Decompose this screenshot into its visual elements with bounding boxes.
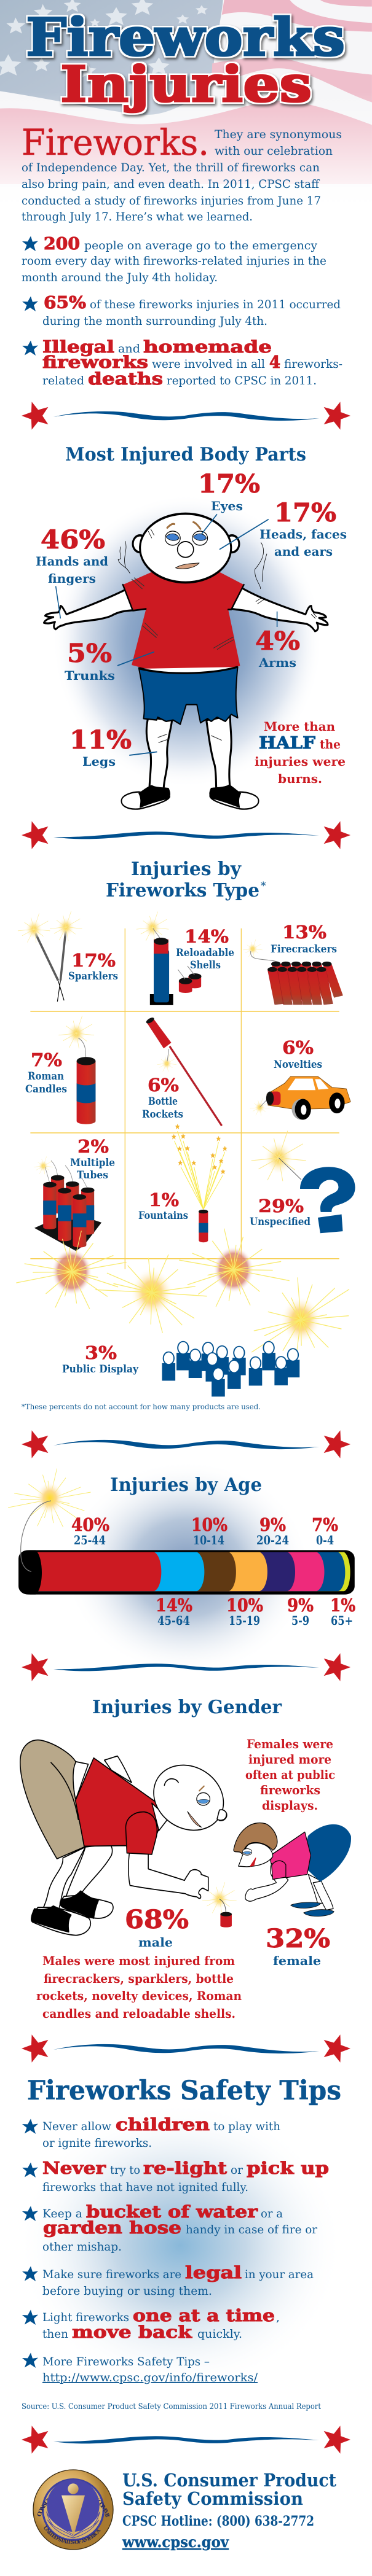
icon: question mark: [251, 1130, 355, 1233]
label: eyes: [198, 469, 260, 513]
heading: injuries by fireworks type: Fireworks Type: [106, 880, 259, 901]
tip: re-light: try to: [110, 2164, 140, 2177]
divider: [22, 821, 350, 849]
intro text: Fireworks.: [22, 122, 209, 163]
labels: fireworks type percentages: Rockets: [142, 1108, 183, 1121]
labels: age groups: 10%: [226, 1595, 263, 1616]
icon: CPSC seal: CONSUMER PRODUCT SAFETY COMMISSION: [37, 2498, 109, 2518]
tip: one at a time: Light fireworks: [42, 2311, 129, 2324]
bullet: 65 percent: 65%: [44, 294, 86, 313]
tip: bucket of water: Keep a: [42, 2208, 82, 2220]
label: trunks: [65, 639, 115, 683]
labels: fireworks type percentages: Multiple: [70, 1157, 115, 1169]
divider: [22, 2034, 350, 2063]
footnote: *These percents do not account for how many products are used.: [22, 1402, 261, 1411]
callout: males: rockets, novelty devices, Roman: [36, 1988, 242, 2003]
intro text: also bring pain, and even death. In 2011, CPSC staff: [22, 178, 320, 191]
chart: age firecracker bar: [8, 1469, 355, 1595]
intro text: conducted a study of fireworks injuries from June 17: [22, 195, 321, 208]
callout: females: fireworks: [260, 1783, 320, 1797]
bullet: illegal and homemade: [22, 338, 342, 389]
labels: fireworks type percentages: 7%: [31, 1049, 62, 1070]
labels: age groups: 0-4: [316, 1533, 334, 1547]
labels: fireworks type percentages: Candles: [25, 1083, 67, 1095]
title: Fireworks: [26, 7, 345, 68]
illustration: public display bursts and crowd: [16, 1229, 363, 1396]
callout: burns: the: [320, 737, 341, 752]
label: arms: 4%: [255, 626, 300, 656]
icon: reloadable shells: [137, 912, 202, 1005]
heading: injuries by fireworks type: [106, 858, 266, 901]
bullet: illegal and homemade: deaths: [88, 370, 163, 389]
tip: bucket of water: or a: [261, 2208, 283, 2220]
bullet: illegal and homemade: and: [118, 343, 140, 356]
callout: males: candles and reloadable shells.: [42, 2006, 235, 2021]
divider: [22, 2426, 350, 2454]
bullet: illegal and homemade: related: [42, 375, 84, 387]
label: hands and fingers: [36, 525, 108, 586]
tip: one at a time: quickly.: [197, 2328, 242, 2341]
intro text: with our celebration: [215, 145, 333, 158]
tip: children: to play with: [213, 2120, 280, 2133]
label: trunks: Trunks: [65, 668, 115, 683]
tip: bucket of water: other mishap.: [42, 2241, 122, 2254]
stat: female: [266, 1924, 330, 1968]
tip: bucket of water: handy in case of fire or: [186, 2224, 317, 2236]
callout: males: Males were most injured from: [42, 1953, 235, 1968]
agency contact: [122, 2470, 337, 2551]
tip: children: or ignite fireworks.: [42, 2137, 152, 2150]
bullet: illegal and homemade: 4: [269, 353, 280, 372]
glow behind age chart: [65, 1460, 311, 1675]
label: heads, faces and ears: Heads, faces: [259, 527, 347, 542]
intro text: [22, 122, 342, 224]
illustration: injured man: [44, 494, 328, 809]
label: legs: Legs: [82, 754, 116, 769]
bullet: illegal and homemade: Illegal: [42, 338, 114, 357]
labels: age groups: 7%: [312, 1514, 338, 1535]
labels: fireworks type percentages: Tubes: [77, 1169, 108, 1181]
icon: fountain: [172, 1124, 228, 1242]
tip: more tips link: [22, 2353, 258, 2384]
tip: re-light: Never: [42, 2159, 106, 2178]
heading: injuries by age: Injuries by Age: [110, 1474, 262, 1496]
tip: legal: [22, 2263, 314, 2298]
tip: bucket of water: bucket of water: [86, 2203, 258, 2222]
label: hands and fingers: fingers: [48, 571, 96, 586]
labels: fireworks type percentages: 3%: [85, 1342, 117, 1363]
labels: age groups: 10%: [191, 1514, 228, 1535]
bullet: 200 people: [22, 235, 326, 284]
label: arms: Arms: [258, 655, 296, 670]
divider: [22, 1653, 350, 1681]
callout: burns: injuries were: [255, 754, 346, 769]
stat: female: female: [273, 1953, 321, 1968]
bullet: illegal and homemade: fireworks-: [284, 358, 342, 371]
label: legs: 11%: [69, 725, 132, 755]
callout: females: injured more: [248, 1752, 331, 1767]
bullet: illegal and homemade: fireworks: [42, 353, 148, 372]
callout: females: [245, 1737, 335, 1813]
labels: age groups: 20-24: [256, 1533, 289, 1547]
callout: females: displays.: [262, 1798, 318, 1813]
heading: most injured body parts: Most Injured Body Parts: [65, 444, 306, 465]
labels: fireworks type percentages: Firecrackers: [271, 943, 337, 955]
labels: age groups: 10-14: [193, 1533, 224, 1547]
glow behind tips: [17, 2101, 343, 2390]
labels: fireworks type percentages: 13%: [282, 922, 326, 943]
labels: fireworks type percentages: Novelties: [274, 1059, 322, 1071]
icon: novelty car: [250, 1076, 350, 1119]
stat: male: male: [138, 1935, 173, 1950]
labels: fireworks type percentages: 1%: [149, 1189, 179, 1210]
labels: age groups: 14%: [156, 1595, 192, 1616]
tip: legal: legal: [185, 2263, 242, 2282]
labels: fireworks type percentages: Roman: [28, 1070, 64, 1083]
illustration: bending man and woman with firework: [20, 1740, 350, 1936]
label: heads, faces and ears: and ears: [274, 544, 333, 559]
labels: age groups: 40%: [71, 1514, 109, 1535]
callout: burns: More than: [264, 719, 335, 734]
source note: Source: U.S. Consumer Product Safety Commission 2011 Fireworks Annual Report: [22, 2402, 322, 2411]
icon: CPSC seal: UNITED STATES OF AMERICA: [44, 2525, 101, 2544]
tip: re-light: re-light: [143, 2159, 228, 2178]
agency contact: www.cpsc.gov: [122, 2533, 229, 2551]
labels: age groups: 25-44: [74, 1533, 106, 1547]
icon: sparklers: [18, 911, 82, 1002]
labels: fireworks type percentages: Sparklers: [68, 970, 118, 983]
tip: children: Never allow: [42, 2120, 111, 2133]
heading: fireworks safety tips: Fireworks Safety Tips: [27, 2076, 341, 2106]
labels: fireworks type percentages: 14%: [184, 926, 229, 947]
labels: age groups: 15-19: [229, 1613, 260, 1628]
labels: fireworks type percentages: 2%: [77, 1136, 109, 1157]
labels: fireworks type percentages: Shells: [190, 959, 221, 971]
divider: [22, 402, 350, 430]
tip: legal: Make sure fireworks are: [42, 2268, 181, 2281]
labels: age groups: 1%: [330, 1595, 355, 1616]
tip: re-light: or: [231, 2164, 243, 2177]
label: hands and fingers: Hands and: [36, 554, 108, 569]
tip: one at a time: move back: [72, 2323, 193, 2342]
labels: fireworks type percentages: Unspecified: [250, 1216, 311, 1228]
label: heads, faces and ears: 17%: [274, 498, 336, 527]
labels: age groups: 45-64: [157, 1613, 190, 1628]
labels: fireworks type percentages: 29%: [258, 1196, 304, 1216]
labels: fireworks type percentages: 17%: [71, 950, 116, 971]
callout: burns: [255, 719, 346, 786]
tip: re-light: pick up: [247, 2159, 329, 2178]
icons: fireworks types: [18, 911, 355, 1251]
callout: burns: burns.: [278, 771, 322, 786]
tip: bucket of water: garden hose: [43, 2219, 181, 2238]
labels: age groups: 65+: [331, 1613, 353, 1628]
flag background: [0, 0, 372, 204]
agency contact: U.S. Consumer Product: [122, 2470, 337, 2491]
bullet: illegal and homemade: were involved in all: [152, 358, 265, 371]
bullet: 200 people: room every day with fireworks-related injuries in the: [22, 255, 326, 268]
icon: bottle rocket: [146, 1016, 222, 1126]
agency contact: CPSC Hotline: (800) 638-2772: [122, 2513, 314, 2529]
tip: legal: in your area: [245, 2268, 314, 2281]
title: [26, 7, 345, 113]
illustration: man: [20, 1740, 231, 1936]
tip: one at a time: then: [42, 2328, 68, 2341]
callout: females: Females were: [247, 1737, 333, 1751]
bullet: 200 people: month around the July 4th holiday.: [22, 271, 218, 284]
heading: injuries by gender: Injuries by Gender: [92, 1697, 282, 1718]
bullet: 65 percent: [22, 294, 341, 328]
icon: roman candle: [58, 1016, 95, 1124]
icon: multiple tubes: [34, 1156, 101, 1251]
tip: one at a time: one at a time: [133, 2306, 275, 2325]
label: hands and fingers: 46%: [41, 525, 105, 555]
callout: burns: HALF: [259, 734, 315, 753]
tip: one at a time: [22, 2306, 280, 2342]
bullet: 65 percent: during the month surrounding July 4th.: [42, 315, 267, 328]
divider: [22, 1430, 350, 1458]
labels: age groups: 9%: [259, 1514, 286, 1535]
label: trunks: 5%: [67, 639, 112, 668]
labels: age groups: 5-9: [291, 1613, 309, 1628]
stat: female: 32%: [266, 1924, 330, 1953]
labels: fireworks type percentages: Reloadable: [176, 947, 234, 959]
label: eyes: 17%: [198, 469, 260, 499]
grid lines: [30, 928, 339, 1269]
bullet: 65 percent: of these fireworks injuries in 2011 occurred: [90, 298, 341, 311]
tip: more tips link: http://www.cpsc.gov/info/fireworks/: [42, 2372, 258, 2384]
callout: males: [36, 1953, 242, 2021]
heading: injuries by fireworks type: Injuries by: [131, 858, 242, 880]
icon: CPSC seal: [33, 2469, 114, 2550]
labels: fireworks type percentages: Fountains: [138, 1210, 188, 1222]
tip: legal: before buying or using them.: [42, 2285, 212, 2298]
label: legs: [69, 725, 132, 769]
bullet: 200 people: people on average go to the emergency: [84, 239, 318, 252]
labels: fireworks type percentages: [25, 922, 337, 1376]
tip: children: children: [116, 2115, 210, 2134]
callout: males: firecrackers, sparklers, bottle: [44, 1971, 234, 1986]
intro text: of Independence Day. Yet, the thrill of fireworks can: [22, 161, 320, 174]
label: arms: [255, 626, 300, 670]
labels: age groups: 9%: [287, 1595, 314, 1616]
labels: fireworks type percentages: 6%: [282, 1037, 314, 1058]
illustration: woman: [234, 1823, 350, 1916]
stat: male: 68%: [125, 1905, 189, 1934]
agency contact: Safety Commission: [122, 2488, 303, 2509]
tip: one at a time: ,: [276, 2311, 280, 2324]
bullet: illegal and homemade: reported to CPSC in 2011.: [167, 375, 317, 387]
labels: fireworks type percentages: Public Display: [62, 1363, 139, 1376]
icon: firework: [202, 1882, 236, 1928]
bullet: illegal and homemade: homemade: [143, 338, 272, 357]
labels: fireworks type percentages: 6%: [148, 1075, 179, 1095]
icon: firecrackers: [243, 940, 343, 1005]
labels: fireworks type percentages: Bottle: [148, 1095, 178, 1108]
label: heads, faces and ears: [259, 498, 347, 559]
labels: age groups: [71, 1514, 355, 1628]
label: eyes: Eyes: [211, 499, 243, 513]
tip: more tips link: More Fireworks Safety Tips –: [42, 2356, 210, 2368]
tip: bucket of water: [22, 2203, 317, 2254]
stat: male: [125, 1905, 189, 1950]
tip: re-light: [22, 2159, 329, 2194]
tip: children: [22, 2115, 280, 2150]
tip: re-light: fireworks that have not ignited fully.: [42, 2181, 248, 2194]
title: Injuries: [60, 55, 312, 113]
heading: injuries by fireworks type: *: [261, 880, 266, 892]
callout: females: often at public: [245, 1767, 335, 1782]
intro text: They are synonymous: [215, 128, 342, 141]
intro text: through July 17. Here’s what we learned.: [22, 211, 253, 224]
bullet: 200 people: 200: [44, 235, 80, 254]
